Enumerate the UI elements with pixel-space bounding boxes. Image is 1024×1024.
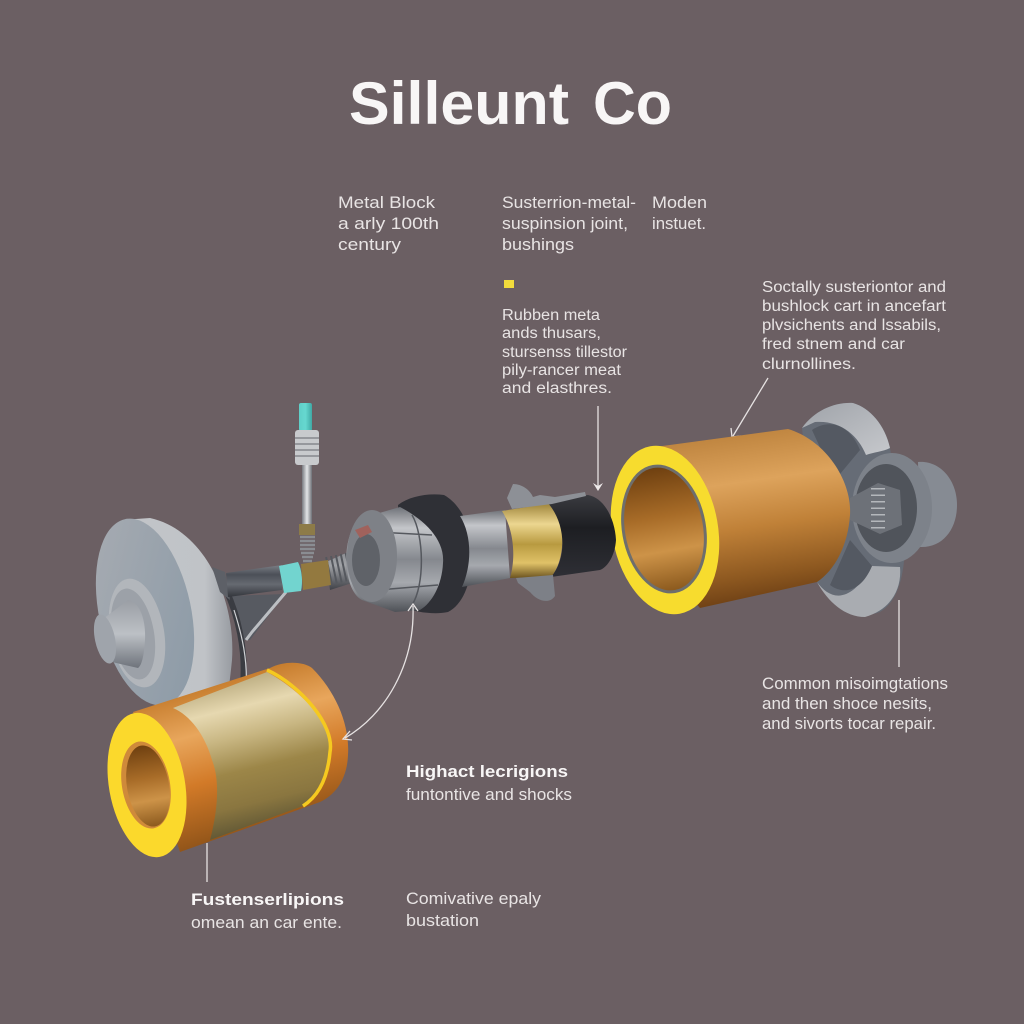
- text block: right description: Soctally susteriontor and: [762, 279, 946, 296]
- rod: [302, 465, 312, 525]
- text block: suspension joint: bushings: [502, 236, 574, 254]
- arrow: curved to small bushing: [343, 604, 418, 740]
- text block: highact: Highact lecrigions: [406, 763, 568, 781]
- orange body: [133, 663, 348, 852]
- assembly: bracket and shaft: [212, 549, 368, 690]
- large bushing: [598, 429, 850, 623]
- text block: comivative: [406, 890, 542, 930]
- hub cylinder: [97, 600, 145, 668]
- disc behind wheel: [226, 590, 244, 684]
- shaft collar: [212, 567, 230, 600]
- assembly: wheel: [80, 510, 232, 714]
- title: [349, 70, 672, 137]
- text block: right description: clurnollines.: [762, 356, 856, 373]
- text block: fustens: Fustenserlipions: [191, 891, 344, 909]
- leader line: below clamp: [898, 600, 900, 667]
- text block: comivative: bustation: [406, 912, 479, 930]
- bore: [115, 738, 177, 832]
- clamp back plate: [802, 403, 905, 615]
- text block: suspension joint: [502, 194, 636, 254]
- lower thread: [300, 537, 315, 561]
- clamp bottom shoe: [817, 566, 900, 617]
- text block: rubber metal: ands thusars,: [502, 325, 601, 342]
- text block: rubber metal: stursenss tillestor: [502, 344, 627, 361]
- inner bore: [615, 461, 713, 597]
- clamp inner shadow: [812, 424, 872, 590]
- inner bore rim: [611, 458, 717, 600]
- housing ribs: [376, 515, 438, 605]
- black cylinder: [545, 495, 616, 577]
- text block: rubber metal: Rubben meta: [502, 307, 600, 324]
- gold mid section: [173, 672, 330, 840]
- text block: highact: funtontive and shocks: [406, 786, 572, 804]
- yellow front ring: [598, 437, 732, 623]
- text block: modern: instuet.: [652, 215, 706, 233]
- icon: yellow marker: [504, 280, 514, 288]
- threaded stud: [326, 549, 368, 590]
- gold coupling: [301, 560, 331, 590]
- body: [655, 429, 850, 608]
- text block: rubber metal: and elasthres.: [502, 380, 612, 397]
- silver cylinder: [460, 510, 510, 587]
- text block: common misinterpretations: [762, 675, 948, 733]
- text block: common misinterpretations: and then shoce nesits,: [762, 695, 932, 713]
- text block: right description: [762, 279, 947, 373]
- assembly: central coupling: [346, 484, 616, 613]
- silver housing: [346, 507, 443, 612]
- text block: fustens: [191, 891, 344, 932]
- cyan band: [279, 562, 302, 593]
- text block: modern: Moden: [652, 194, 707, 212]
- text block: suspension joint: Susterrion-metal-: [502, 194, 636, 212]
- text block: metal block: [338, 194, 439, 254]
- leader line: below small bushing: [206, 843, 208, 882]
- brass collar: [299, 524, 315, 535]
- wing tab top: [507, 484, 586, 509]
- teal pin: [299, 403, 312, 431]
- text block: rubber metal: pily-rancer meat: [502, 362, 622, 379]
- threaded head: [295, 430, 319, 465]
- text block: right description: bushlock cart in ancefart: [762, 298, 947, 315]
- bracket: [228, 594, 285, 640]
- wheel rim: [122, 518, 232, 712]
- hub threaded core: [850, 483, 902, 534]
- assembly: right clamp and hub: [802, 403, 957, 617]
- text block: rubber metal: [502, 307, 627, 397]
- text block: common misinterpretations: and sivorts tocar repair.: [762, 715, 936, 733]
- gold sleeve: [502, 503, 562, 578]
- small bushing: [97, 663, 348, 863]
- housing face: [347, 510, 397, 602]
- clamp top shoe: [802, 403, 890, 455]
- text block: comivative: Comivative epaly: [406, 890, 542, 908]
- wheel face: [80, 510, 210, 714]
- text block: modern: [652, 194, 707, 233]
- text block: metal block: century: [338, 236, 402, 254]
- wing tab bottom: [516, 575, 555, 601]
- rear cap: [918, 462, 957, 547]
- hub disc: [852, 453, 932, 563]
- black flange: [398, 494, 472, 613]
- hub ring: [101, 574, 173, 692]
- shaft: [226, 565, 282, 597]
- yellow front ring: [97, 707, 197, 863]
- title: Co: [593, 70, 672, 137]
- text block: common misinterpretations: Common misoimgtations: [762, 675, 948, 693]
- assembly: vertical rod: [295, 403, 319, 561]
- text block: highact: [406, 763, 572, 804]
- text block: metal block: a arly 100th: [338, 215, 439, 233]
- text block: metal block: Metal Block: [338, 194, 436, 212]
- arrow: to large bushing: [731, 378, 768, 437]
- text block: fustens: omean an car ente.: [191, 914, 342, 932]
- title: Silleunt: [349, 70, 569, 137]
- arrow: to black cylinder: [593, 406, 603, 491]
- text block: right description: plvsichents and lssabils,: [762, 317, 941, 334]
- yellow inner arc: [267, 670, 330, 806]
- text block: right description: fred stnem and car: [762, 336, 905, 353]
- text block: suspension joint: suspinsion joint,: [502, 215, 628, 233]
